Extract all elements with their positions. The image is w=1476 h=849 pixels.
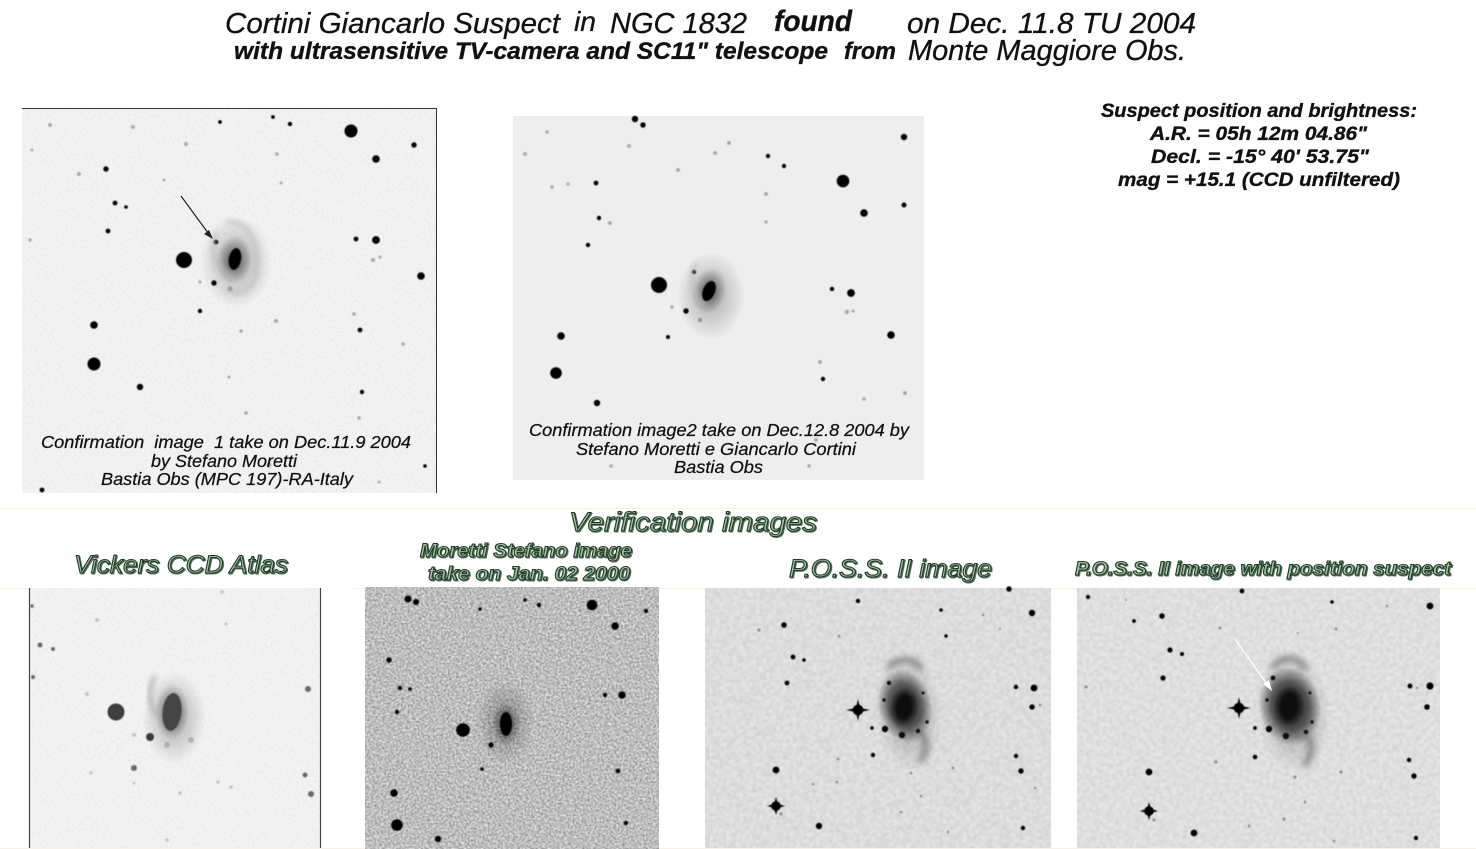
title: NGC 1832 bbox=[610, 8, 747, 40]
star-forming knots bbox=[1265, 676, 1314, 739]
title: found bbox=[774, 5, 853, 38]
title: with ultrasensitive TV-camera and SC11" telescope bbox=[234, 38, 828, 65]
title bbox=[225, 5, 1196, 67]
star-forming knots bbox=[882, 681, 929, 738]
stars bbox=[773, 586, 1037, 830]
faint stars bbox=[758, 614, 1041, 833]
panel: P.O.S.S. II image with position suspect bbox=[1077, 588, 1440, 848]
galaxy NGC 1832 bbox=[142, 672, 206, 764]
galaxy NGC 1832 bbox=[868, 651, 948, 773]
title: on Dec. 11.8 TU 2004 bbox=[907, 8, 1196, 40]
stars bbox=[1086, 589, 1434, 840]
diffraction-spike stars bbox=[767, 699, 870, 815]
galaxy NGC 1832 bbox=[475, 678, 535, 766]
title: in bbox=[574, 6, 596, 37]
arrow to suspect bbox=[181, 196, 213, 239]
text block: suspect position and brightness: A.R. = 05h 12m 04.86" bbox=[1149, 124, 1368, 145]
galaxy NGC 1832 bbox=[200, 216, 272, 308]
text block: suspect position and brightness: mag = +15.1 (CCD unfiltered) bbox=[1118, 170, 1400, 191]
text block: suspect position and brightness bbox=[1101, 101, 1417, 191]
stars bbox=[550, 116, 907, 406]
caption: Confirmation image2 take on Dec.12.8 2004 by bbox=[529, 420, 910, 440]
faint stars bbox=[28, 123, 405, 484]
title: Monte Maggiore Obs. bbox=[908, 35, 1186, 67]
stars bbox=[386, 596, 648, 842]
panel: Vickers CCD Atlas image bbox=[29, 588, 321, 848]
heading: verification images: Verification images bbox=[569, 507, 817, 537]
panel: confirmation image 2 bbox=[513, 116, 924, 480]
caption bbox=[529, 420, 910, 477]
heading: P.O.S.S. II image with position suspect: P.O.S.S. II image with position suspect bbox=[1075, 559, 1452, 580]
faint stars bbox=[1084, 599, 1418, 842]
text block: suspect position and brightness: Decl. = -15° 40' 53.75" bbox=[1151, 147, 1370, 168]
caption bbox=[41, 432, 411, 489]
caption: Confirmation image 1 take on Dec.11.9 2004 bbox=[41, 432, 411, 452]
title: from bbox=[844, 38, 896, 65]
faint stars bbox=[523, 130, 907, 468]
panel: P.O.S.S. II image bbox=[705, 586, 1051, 848]
heading: Moretti Stefano image bbox=[420, 541, 632, 585]
galaxy NGC 1832 bbox=[1249, 648, 1337, 776]
heading: Moretti Stefano image: take on Jan. 02 2000 bbox=[428, 564, 630, 585]
heading: Vickers CCD Atlas: Vickers CCD Atlas bbox=[74, 551, 288, 579]
arrow to suspect position bbox=[1235, 639, 1272, 691]
title: Cortini Giancarlo Suspect bbox=[225, 8, 562, 40]
caption: Bastia Obs (MPC 197)-RA-Italy bbox=[101, 469, 354, 489]
heading: Moretti Stefano image: Moretti Stefano image bbox=[420, 541, 632, 562]
heading: P.O.S.S. II image: P.O.S.S. II image bbox=[789, 555, 992, 583]
panel: Moretti Stefano image bbox=[365, 587, 659, 849]
text block: suspect position and brightness: Suspect position and brightness: bbox=[1101, 101, 1417, 122]
caption: Stefano Moretti e Giancarlo Cortini bbox=[576, 439, 857, 459]
panel: confirmation image 1 bbox=[22, 108, 437, 493]
diffraction-spike stars bbox=[1140, 697, 1251, 820]
galaxy NGC 1832 bbox=[677, 252, 745, 340]
companion star bbox=[108, 704, 154, 741]
caption: by Stefano Moretti bbox=[151, 451, 298, 471]
caption: Bastia Obs bbox=[674, 457, 763, 477]
stars bbox=[30, 590, 314, 842]
stars bbox=[40, 115, 427, 492]
